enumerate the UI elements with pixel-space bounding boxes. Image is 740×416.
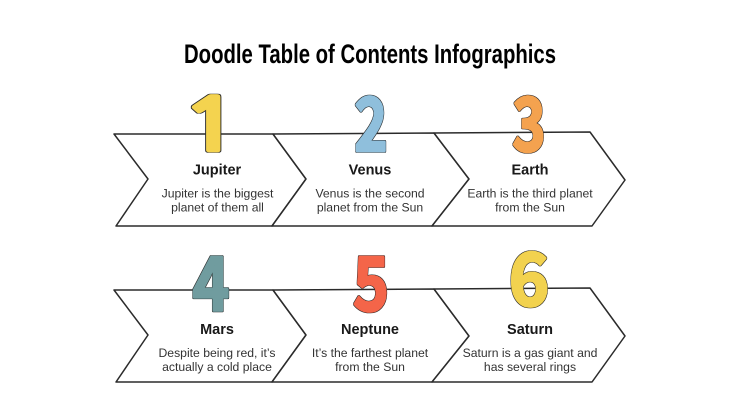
heading: Mars: Mars xyxy=(200,322,234,338)
description: Venus: Venus is the second xyxy=(315,186,425,200)
description: Jupiter: Jupiter is the biggest xyxy=(162,186,273,200)
title: Doodle Table of Contents Infographics xyxy=(184,39,556,69)
panel: 1 Jupiter xyxy=(114,91,306,226)
panel: 3 Earth xyxy=(432,65,625,226)
number 4: 4 xyxy=(193,225,229,332)
panel: 5 Neptune xyxy=(272,226,469,382)
panel: 4 Mars xyxy=(114,225,306,382)
description: Saturn: Saturn is a gas giant and xyxy=(463,346,597,360)
number 3: 3 xyxy=(512,65,546,172)
description: Earth: from the Sun xyxy=(495,200,565,214)
heading: Saturn: Saturn xyxy=(507,322,553,338)
number 2: 2 xyxy=(354,65,388,172)
number 5: 5 xyxy=(353,226,389,332)
number 1: 1 xyxy=(181,91,241,163)
description: Saturn: has several rings xyxy=(484,360,576,374)
description: Neptune: It’s the farthest planet xyxy=(312,346,428,360)
description: Earth: Earth is the third planet xyxy=(467,186,593,200)
heading: Neptune: Neptune xyxy=(341,322,399,338)
description: Mars: Despite being red, it’s xyxy=(159,346,275,360)
panel: 2 Venus xyxy=(272,65,469,226)
description: Mars: actually a cold place xyxy=(162,360,272,374)
panel: 6 Saturn xyxy=(432,222,625,382)
heading: Jupiter: Jupiter xyxy=(193,162,242,178)
description: Jupiter: planet of them all xyxy=(171,200,264,214)
description: Venus: planet from the Sun xyxy=(317,200,423,214)
number 6: 6 xyxy=(509,222,549,327)
heading: Earth: Earth xyxy=(511,162,549,178)
description: Neptune: from the Sun xyxy=(335,360,405,374)
heading: Venus: Venus xyxy=(349,162,391,178)
